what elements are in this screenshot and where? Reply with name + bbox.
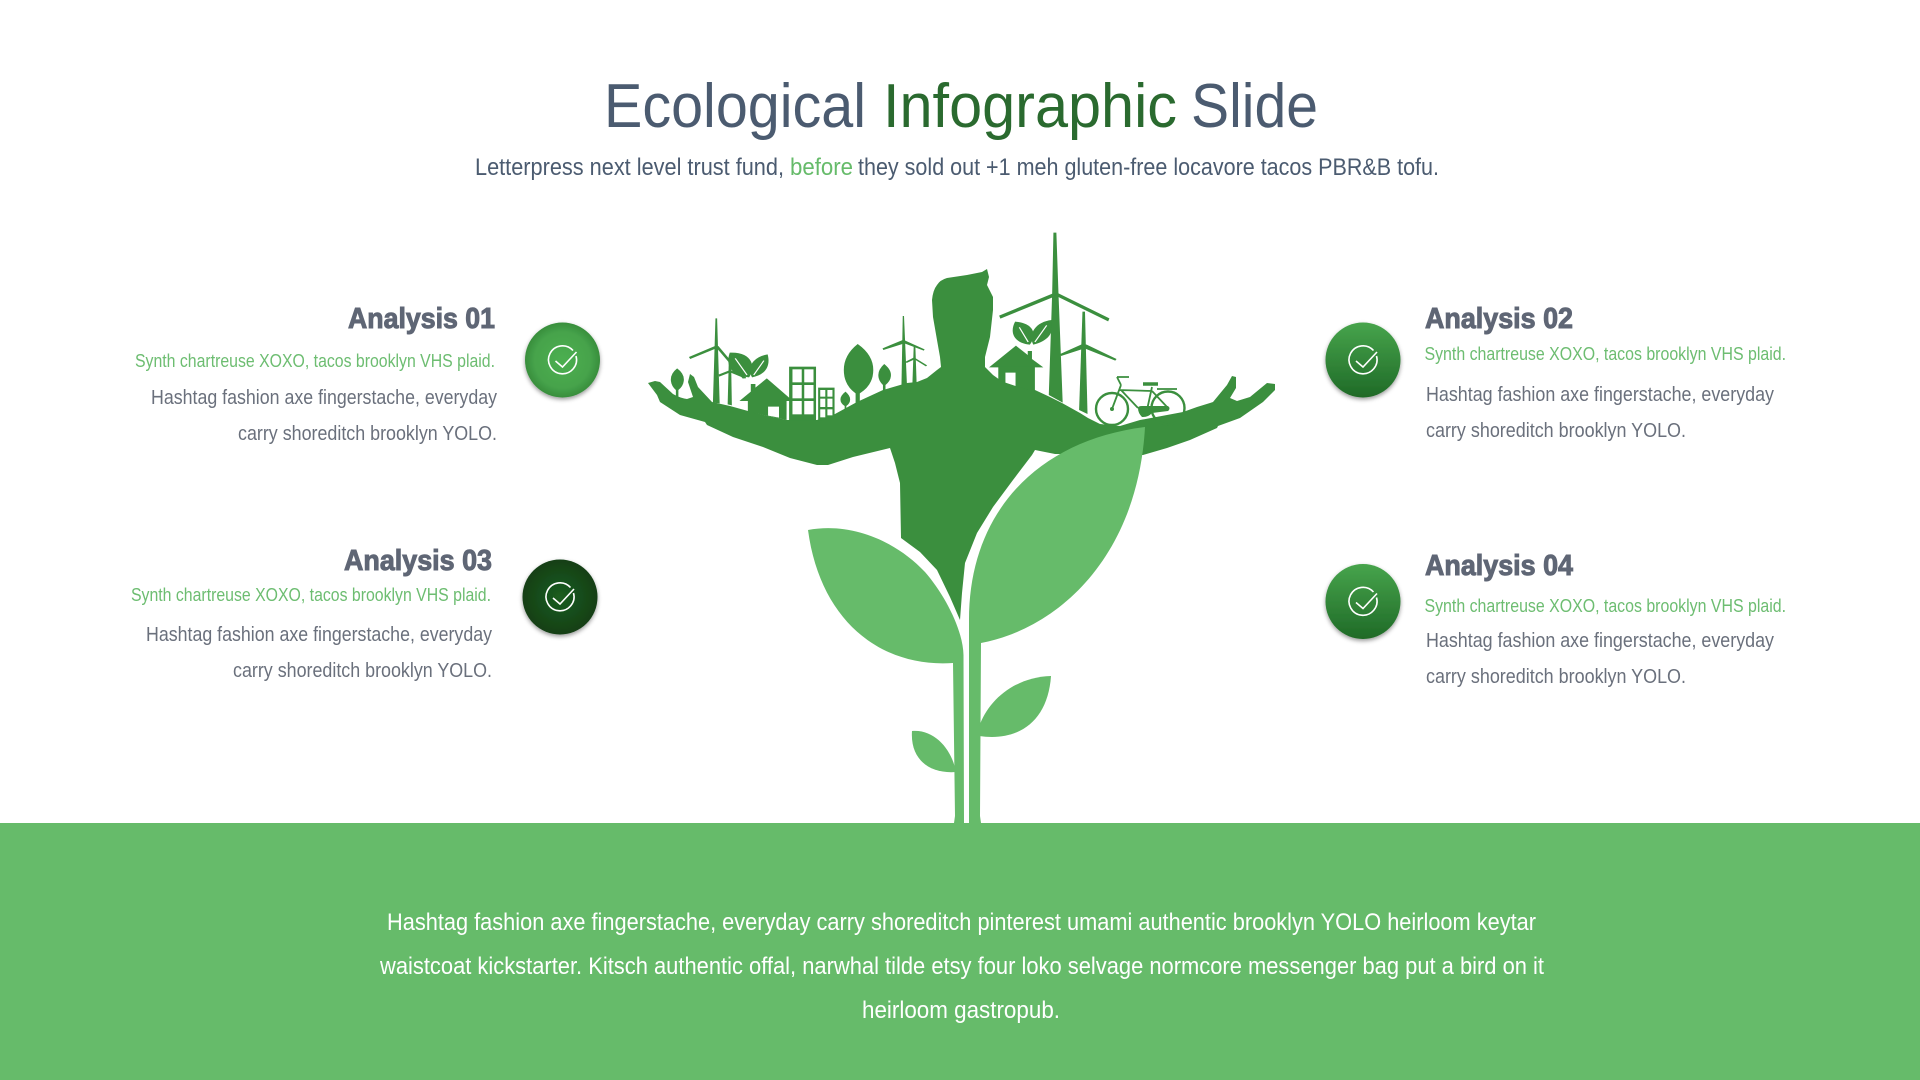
heading: Analysis 01 — [348, 303, 495, 335]
icon: check badge — [1326, 322, 1400, 398]
title: Slide — [1191, 72, 1318, 141]
subtitle: before — [790, 154, 853, 181]
icon: small building — [818, 388, 835, 421]
icon: left sprout — [728, 353, 769, 377]
right large leaf — [969, 427, 1145, 823]
icon: left house — [739, 378, 790, 420]
plant — [808, 427, 1145, 823]
icon: big wind turbines — [999, 233, 1117, 414]
subtitle: they sold out +1 meh gluten-free locavore tacos PBR&B tofu. — [858, 154, 1439, 181]
panel: analysis 02 — [1326, 303, 1786, 442]
icon: check badge — [522, 560, 598, 634]
small left leaf — [912, 731, 956, 772]
panel: analysis 04 — [1326, 550, 1786, 688]
illustration: man with city and plant — [648, 233, 1275, 823]
green line: Synth chartreuse XOXO, tacos brooklyn VHS plaid. — [1424, 596, 1786, 616]
panel: analysis 01 — [135, 303, 600, 445]
band text: waistcoat kickstarter. Kitsch authentic offal, narwhal tilde etsy four loko selvage normcore messenger bag put a bird on it — [379, 953, 1544, 980]
heading: Analysis 03 — [344, 545, 492, 577]
description: Hashtag fashion axe fingerstache, everyday — [1426, 384, 1774, 406]
city group — [671, 233, 1117, 421]
description — [1426, 384, 1774, 442]
description: Hashtag fashion axe fingerstache, everyday — [1426, 630, 1774, 652]
description — [1426, 630, 1774, 688]
icon: tall building — [789, 367, 816, 421]
green line: Synth chartreuse XOXO, tacos brooklyn VHS plaid. — [1424, 344, 1786, 364]
description: carry shoreditch brooklyn YOLO. — [238, 423, 497, 445]
description — [146, 624, 492, 682]
description — [151, 387, 497, 445]
subtitle: Letterpress next level trust fund, — [475, 154, 784, 181]
green line: Synth chartreuse XOXO, tacos brooklyn VHS plaid. — [135, 351, 495, 371]
description: Hashtag fashion axe fingerstache, everyday — [151, 387, 497, 409]
subtitle — [475, 154, 1439, 181]
left large leaf — [808, 528, 964, 823]
icon: left wind turbines — [689, 318, 746, 405]
man silhouette with eco city — [648, 233, 1275, 620]
description: Hashtag fashion axe fingerstache, everyday — [146, 624, 492, 646]
description: carry shoreditch brooklyn YOLO. — [233, 660, 492, 682]
icon: check badge — [1326, 564, 1400, 639]
man body — [648, 269, 1275, 620]
panel: analysis 03 — [131, 545, 598, 682]
heading: Analysis 02 — [1425, 303, 1573, 335]
band text — [379, 909, 1544, 1024]
small right leaf — [979, 676, 1051, 737]
icon: right sprout — [1013, 320, 1052, 345]
icon: center wind turbines — [883, 316, 927, 385]
icon: bicycle — [1096, 377, 1184, 425]
bottom band — [0, 823, 1920, 1080]
title: Ecological — [604, 72, 866, 141]
title: Infographic — [883, 72, 1177, 141]
band text: heirloom gastropub. — [862, 997, 1060, 1024]
title — [604, 72, 1318, 141]
description: carry shoreditch brooklyn YOLO. — [1426, 420, 1686, 442]
description: carry shoreditch brooklyn YOLO. — [1426, 666, 1686, 688]
green line: Synth chartreuse XOXO, tacos brooklyn VHS plaid. — [131, 585, 491, 605]
icon: right house — [989, 346, 1043, 392]
band text: Hashtag fashion axe fingerstache, everyday carry shoreditch pinterest umami authentic brooklyn YOLO heirloom keytar — [387, 909, 1536, 936]
icon: check badge — [525, 322, 600, 398]
heading: Analysis 04 — [1425, 550, 1573, 582]
icon: trees — [671, 344, 891, 410]
